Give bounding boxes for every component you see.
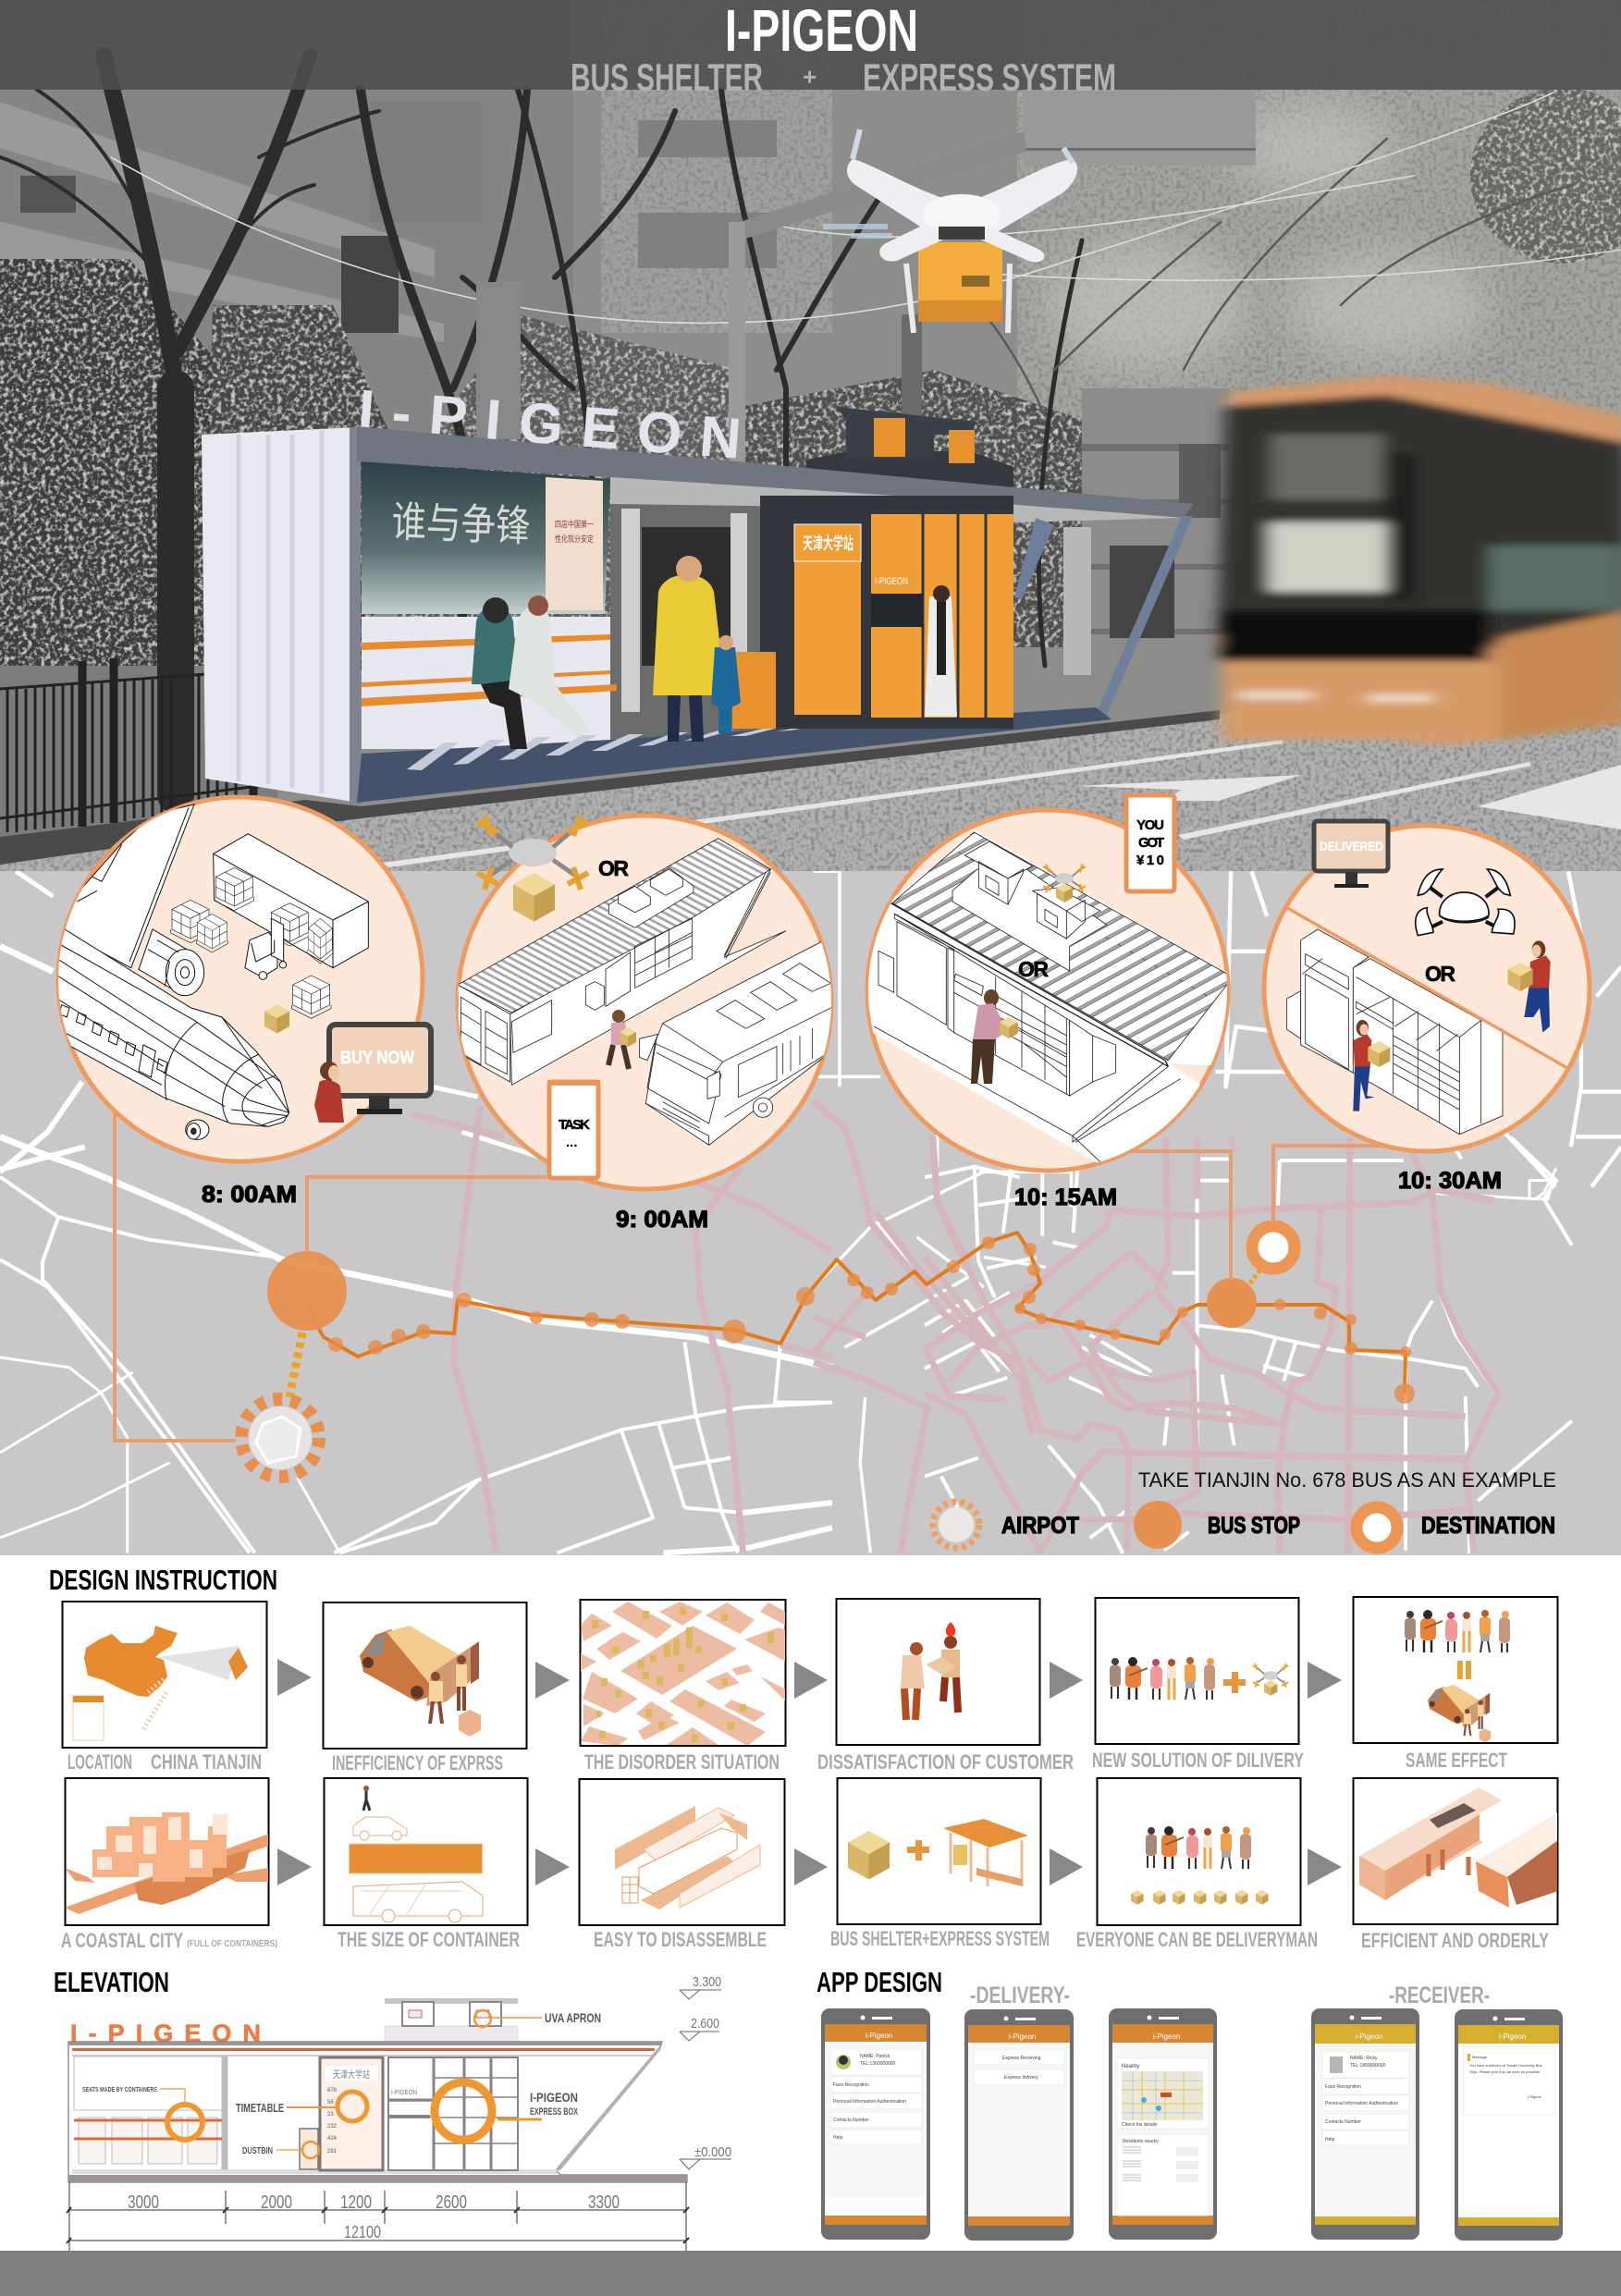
plane fuselage	[49, 925, 289, 1139]
small drone	[1043, 865, 1086, 892]
reward phone: ¥10	[1136, 853, 1164, 868]
pink bus lines centre	[814, 1101, 1020, 1553]
task phone	[547, 1080, 600, 1178]
dimension lines: 12100	[344, 2223, 381, 2241]
arrow	[1308, 1848, 1342, 1885]
shelter floor and wall	[510, 869, 786, 1085]
ribbed roof	[458, 839, 770, 1013]
callout labels: I-PIGEON	[530, 2090, 578, 2105]
timetable column: 232	[327, 2124, 338, 2130]
trash bin	[732, 652, 776, 729]
timetable column: 678	[327, 2088, 338, 2093]
seating wall with benches	[362, 617, 617, 749]
outline drone	[1416, 869, 1515, 936]
dashed link to destination	[1250, 1270, 1260, 1283]
phone 1: delivery profile: Face Recognition	[833, 2082, 869, 2088]
caption: DISSATISFACTION OF CUSTOMER	[817, 1750, 1074, 1774]
caption: THE SIZE OF CONTAINER	[338, 1928, 520, 1951]
level markers: 3.300	[693, 1974, 721, 1990]
time labels: 8: 00AM	[202, 1182, 297, 1208]
waiting people	[472, 556, 957, 749]
street photo scene	[0, 0, 1621, 874]
courier left	[1353, 1020, 1390, 1111]
phone 1: delivery profile: TEL:1360000000	[860, 2061, 896, 2067]
step 2: inefficient express	[324, 1602, 527, 1774]
ribbed roof	[892, 832, 1233, 1061]
legend note: TAKE TIANJIN No. 678 BUS AS AN EXAMPLE	[1138, 1468, 1556, 1492]
white roads west	[0, 871, 832, 1553]
callout labels: DUSTBIN	[242, 2146, 273, 2156]
phone 4: receiver profile: Personal Information Authentication	[1325, 2101, 1398, 2106]
or label: OR	[1425, 962, 1455, 986]
task phone: TASK	[559, 1117, 590, 1133]
arrow	[794, 1662, 828, 1699]
phone 2: delivery menu: Express delivery	[1004, 2075, 1038, 2081]
phone 2: delivery menu: i-Pigeon	[1009, 2032, 1036, 2041]
shelter wall details	[511, 872, 770, 1052]
step 6: same effect	[1354, 1597, 1557, 1772]
or label: OR	[1018, 957, 1049, 981]
white lower section	[0, 1555, 1621, 2251]
step 9: easy to disassemble	[579, 1779, 784, 1951]
buyer at monitor: BUY NOW	[340, 1049, 414, 1068]
phone 2: delivery menu: Express Receiving	[1002, 2056, 1041, 2061]
wall and lockers	[878, 914, 1181, 1142]
poster back wall	[362, 461, 610, 614]
caption: EASY TO DISASSEMBLE	[594, 1928, 767, 1951]
route stops	[328, 1236, 1415, 1404]
right roof strut	[1014, 516, 1193, 717]
elevation drawing	[67, 1974, 731, 2253]
caption: CHINA TIANJIN	[151, 1750, 262, 1774]
dimension lines: 3000	[128, 2192, 159, 2213]
white roads east	[925, 1137, 1572, 1553]
phone 3: nearby map: Residents nearby	[1123, 2139, 1159, 2144]
phone 4: receiver profile: TEL:1800000000	[1350, 2063, 1386, 2069]
sign letters: I-PIGEON	[70, 2020, 261, 2047]
express locker kiosk	[760, 496, 1013, 729]
legend bus stop	[1134, 1501, 1300, 1549]
timetable column: 天津大学站	[333, 2068, 370, 2081]
phone 5: receiver message: Stop. Please pick it up as soon as possible.	[1469, 2069, 1541, 2074]
legend destination	[1357, 1507, 1555, 1548]
dashed link to airport	[289, 1332, 302, 1397]
poster back wall: 四店中国第一	[555, 519, 594, 529]
panel: airport circle 8:00	[49, 797, 431, 1161]
caption: LOCATION	[68, 1750, 132, 1774]
back wall behind shelter	[610, 490, 760, 749]
phone 3: nearby map: i-Pigeon	[1153, 2032, 1180, 2041]
subtitle: +	[803, 63, 817, 91]
timetable column: 23	[327, 2112, 334, 2118]
phone 5: receiver message: I-Pigeon	[1528, 2094, 1541, 2099]
caption: EFFICIENT AND ORDERLY	[1361, 1929, 1549, 1952]
label: delivery: -DELIVERY-	[970, 1983, 1070, 2008]
buyer at monitor	[314, 1025, 431, 1123]
bus route line	[307, 1233, 1406, 1394]
level markers	[680, 1974, 731, 2169]
poster back wall: 性化就分安定	[555, 534, 594, 544]
plane wing	[55, 804, 194, 968]
step 7: coastal city	[61, 1778, 277, 1952]
drone option	[477, 816, 629, 921]
step 3: disorder	[581, 1600, 786, 1774]
phone 4: receiver profile: Face Recognition	[1325, 2084, 1361, 2090]
time labels	[202, 1171, 1501, 1228]
reward phone: GOT	[1138, 835, 1164, 851]
step 1: location	[63, 1602, 266, 1774]
task phone: ...	[566, 1135, 578, 1150]
white roads centre	[814, 871, 1621, 1553]
timetable column: 291	[327, 2149, 338, 2155]
roof fascia	[357, 426, 1194, 518]
heading: elevation: ELEVATION	[54, 1966, 169, 1998]
customer at locker	[971, 989, 1018, 1084]
delivered monitor: DELIVERED	[1320, 839, 1383, 853]
caption: THE DISORDER SITUATION	[584, 1750, 780, 1774]
drone option: OR	[598, 856, 629, 880]
dimension lines: 2600	[436, 2192, 467, 2213]
poster slogan: 谁与争锋	[391, 497, 531, 550]
express locker kiosk: 天津大学站	[803, 534, 853, 553]
level markers: ±0.000	[694, 2144, 731, 2160]
airport marker	[241, 1399, 319, 1477]
roof block	[952, 841, 1107, 971]
timetable column: 56	[327, 2100, 334, 2106]
arrow	[1050, 1848, 1083, 1885]
step 10: shelter plus express	[830, 1778, 1050, 1950]
pink bus lines east	[925, 1137, 1498, 1553]
label: receiver: -RECEIVER-	[1389, 1983, 1490, 2008]
callout leader lines	[160, 2018, 542, 2150]
canopy and base	[68, 2042, 687, 2182]
city map	[0, 871, 1621, 1555]
orange callout rings	[167, 2010, 492, 2158]
roof block	[608, 867, 694, 927]
bus shelter	[202, 378, 1194, 804]
step 12: efficient and orderly	[1354, 1778, 1558, 1952]
dimension lines: 1200	[340, 2192, 372, 2213]
rooftop dock	[385, 1998, 518, 2042]
poster frame and seats	[74, 2057, 227, 2169]
locker cabinets	[1287, 929, 1503, 1135]
dimension lines: 3300	[588, 2192, 620, 2213]
express box elevation	[388, 2057, 518, 2170]
page header band	[0, 0, 1621, 99]
caption: EVERYONE CAN BE DELIVERYMAN	[1076, 1928, 1318, 1951]
caption: SAME EFFECT	[1406, 1749, 1507, 1772]
level markers: 2.600	[691, 2016, 719, 2032]
phone 5: receiver message	[1455, 2009, 1563, 2241]
phone 2: delivery menu	[964, 2009, 1074, 2241]
express box elevation: I-PIGEON	[391, 2090, 417, 2096]
phone 5: receiver message: Message	[1472, 2055, 1488, 2059]
phone 3: nearby map: Nearby	[1122, 2064, 1139, 2069]
express locker kiosk: I-PIGEON	[875, 576, 908, 587]
arrow	[277, 1659, 312, 1696]
rooftop drone dock	[806, 407, 1013, 488]
second bus stop	[1207, 1278, 1257, 1328]
time labels: 10: 30AM	[1398, 1168, 1502, 1194]
time labels: 9: 00AM	[616, 1207, 708, 1233]
dimension lines: 2000	[261, 2192, 292, 2213]
phone 5: receiver message: You have a delivery at Tianjin University Bus	[1469, 2063, 1542, 2068]
step 8: container size	[324, 1778, 527, 1951]
step 5: new solution	[1092, 1598, 1304, 1772]
caption: INEFFICIENCY OF EXPRSS	[332, 1751, 503, 1774]
bus	[640, 936, 834, 1145]
delivery person	[608, 1010, 636, 1069]
phone 4: receiver profile: i-Pigeon	[1356, 2032, 1382, 2041]
subtitle: EXPRESS SYSTEM	[863, 55, 1116, 99]
callout labels: UVA APRON	[545, 2010, 601, 2025]
phone 3: nearby map	[1109, 2008, 1217, 2240]
white building footprint	[860, 830, 1233, 1168]
phone 5: receiver message: i-Pigeon	[1499, 2032, 1526, 2041]
dustbin	[300, 2129, 318, 2169]
arrow	[535, 1848, 570, 1885]
cargo container	[214, 834, 368, 968]
eave	[890, 903, 1168, 1066]
subtitle: BUS SHELTER	[571, 55, 763, 99]
phone 1: delivery profile	[821, 2008, 930, 2240]
heading: design instruction: DESIGN INSTRUCTION	[49, 1564, 277, 1596]
legend airport: AIRPOT	[1001, 1513, 1079, 1539]
forklift	[245, 918, 287, 979]
phone 4: receiver profile: NAME: Ricky	[1350, 2056, 1378, 2061]
first bus stop	[267, 1251, 347, 1331]
phone 4: receiver profile	[1311, 2008, 1419, 2240]
step 4: dissatisfaction	[817, 1599, 1074, 1774]
drone carrying parcel	[823, 129, 1077, 333]
courier right	[1508, 940, 1551, 1033]
pink bus lines west	[411, 1107, 832, 1553]
heading: app design: APP DESIGN	[817, 1966, 942, 1998]
step 11: everyone can deliver	[1076, 1778, 1318, 1951]
legend bus stop: BUS STOP	[1208, 1513, 1300, 1539]
arrow	[277, 1848, 312, 1885]
phone 3: nearby map: Check the details	[1122, 2122, 1158, 2128]
floor	[357, 707, 1111, 803]
arrow	[1050, 1662, 1083, 1699]
divider	[1287, 908, 1567, 1068]
street sign and lamp pole	[476, 90, 1256, 499]
phone 4: receiver profile: Help	[1325, 2137, 1335, 2143]
caption	[68, 1750, 262, 1774]
arrow	[535, 1662, 570, 1699]
connector lines	[115, 1110, 1395, 1441]
arrow	[794, 1848, 828, 1885]
container side wall	[202, 427, 361, 804]
reward phone: YOU	[1136, 817, 1164, 833]
reward phone	[1126, 795, 1174, 891]
phone 1: delivery profile: NAME: Patrick	[860, 2054, 890, 2059]
panel: bus shelter circle 9:00	[458, 816, 834, 1189]
shelter container end	[458, 985, 510, 1082]
phone 1: delivery profile: Help	[833, 2135, 843, 2141]
arrow	[1308, 1662, 1342, 1699]
bottom band	[0, 2251, 1621, 2296]
caption: BUS SHELTER+EXPRESS SYSTEM	[830, 1927, 1050, 1950]
callout labels: SEATS MADE BY CONTAINERS	[82, 2087, 157, 2093]
dimension lines	[67, 2182, 689, 2253]
destination marker	[1252, 1226, 1295, 1269]
timetable column	[320, 2057, 383, 2170]
time labels: 10: 15AM	[1014, 1185, 1117, 1210]
callout labels: EXPRESS BOX	[530, 2106, 578, 2118]
plane engine	[139, 929, 204, 996]
caption: A COASTAL CITY	[61, 1929, 183, 1952]
phone 1: delivery profile: i-Pigeon	[866, 2032, 892, 2040]
phone 4: receiver profile: Contacts Number	[1325, 2119, 1361, 2125]
legend airport	[933, 1502, 1079, 1548]
blurred bus	[1218, 376, 1621, 745]
roadside fence	[0, 656, 259, 832]
callout labels	[82, 2010, 601, 2156]
caption: NEW SOLUTION OF DILIVERY	[1092, 1749, 1304, 1772]
subtitle	[571, 55, 1116, 99]
legend destination: DESTINATION	[1421, 1513, 1555, 1539]
shelter sign letters: I-PIGEON	[356, 378, 743, 472]
phone 1: delivery profile: Contacts Number	[833, 2118, 869, 2123]
delivered monitor	[1314, 821, 1388, 888]
map legend	[933, 1468, 1556, 1549]
panel: pickup circle 10:30	[1264, 821, 1590, 1151]
panel: locker circle 10:15	[860, 795, 1233, 1171]
parcel	[264, 1004, 289, 1034]
callout labels: TIMETABLE	[236, 2101, 284, 2115]
timetable column: 424	[327, 2136, 338, 2142]
pallet stacks	[171, 867, 333, 1018]
small parcel	[1056, 883, 1073, 902]
phone 1: delivery profile: Personal Information Authentication	[833, 2099, 906, 2105]
caption: (FULL OF CONTAINERS)	[187, 1939, 277, 1949]
